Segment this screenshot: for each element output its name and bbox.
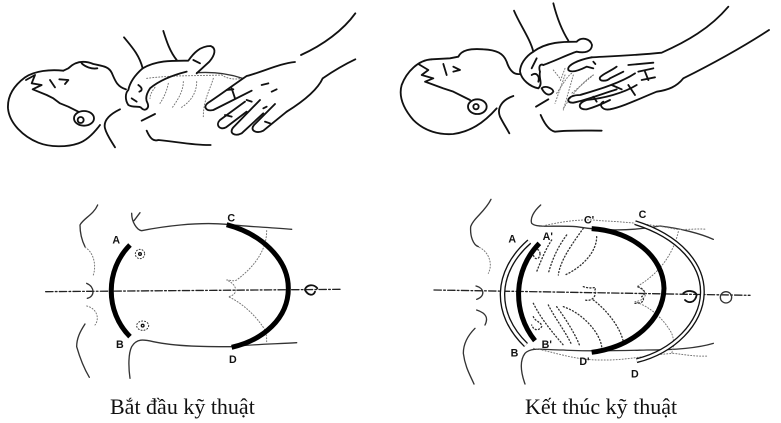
labels (112, 212, 237, 366)
labels: B (511, 347, 519, 359)
diagram: chest outline at end of technique (434, 199, 750, 384)
labels: A' (543, 231, 553, 243)
compressing hand (205, 13, 355, 135)
midline axis (46, 289, 340, 292)
illustration: infant with hands at start of technique (8, 13, 355, 147)
caption: start of technique: Bắt đầu kỹ thuật (110, 394, 255, 419)
infant torso (105, 72, 243, 147)
labels: D' (579, 356, 590, 368)
arc A'-B' (519, 243, 539, 341)
compressing hand (555, 7, 769, 110)
labels (508, 209, 647, 380)
labels: A (112, 234, 120, 246)
labels: D (631, 368, 639, 380)
labels: D (229, 354, 237, 366)
labels: B' (542, 339, 552, 351)
supporting hand around neck (514, 3, 592, 95)
body outline (77, 205, 317, 378)
labels: C (639, 209, 647, 221)
arc A-B (111, 245, 130, 337)
infant torso (499, 68, 602, 133)
infant head (401, 49, 520, 134)
double arc C-D (635, 223, 702, 361)
labels: C' (584, 214, 594, 226)
arc C'-D' (592, 229, 664, 352)
body outline (463, 199, 732, 384)
labels: C (227, 212, 235, 224)
labels: A (508, 233, 516, 245)
caption: end of technique: Kết thúc kỹ thuật (525, 394, 677, 419)
arc C-D (227, 225, 288, 347)
infant head (8, 62, 126, 146)
diagram: chest outline at start of technique (46, 205, 340, 378)
double arc A-B (503, 242, 529, 345)
supporting hand around neck (124, 31, 214, 110)
labels: B (116, 339, 124, 351)
illustration: infant with hands at end of technique (401, 3, 769, 134)
midline axis (434, 290, 750, 295)
